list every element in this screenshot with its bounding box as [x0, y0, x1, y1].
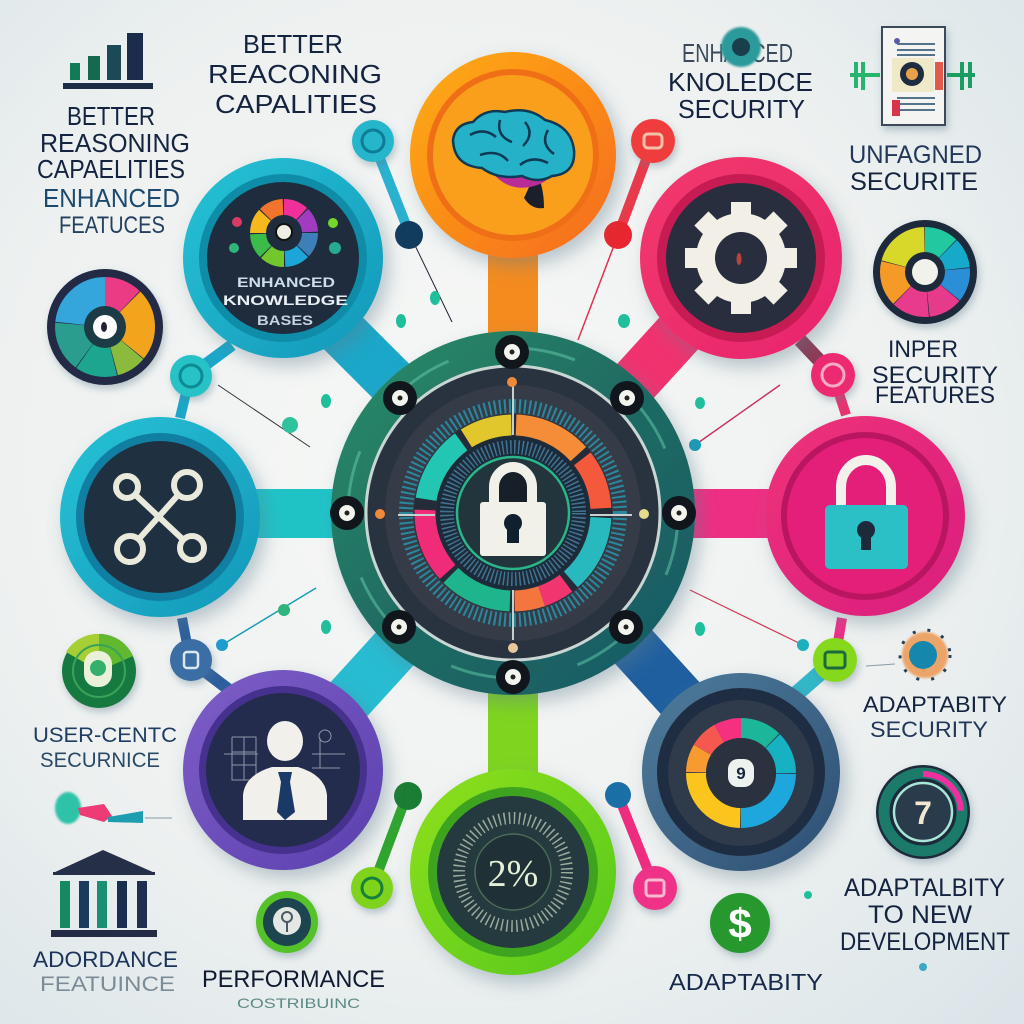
node: slate donut chart [642, 673, 840, 871]
label: unfagned securite [849, 141, 982, 196]
node caption: BASES [257, 312, 313, 328]
icon: teal swirl [721, 27, 761, 67]
icon: padlock [825, 460, 908, 569]
donut chart [677, 709, 805, 837]
node caption: KNOWLEDGE [223, 292, 348, 308]
node: lime gauge: 2% [488, 853, 538, 895]
label: better reasoning capabilities (top): CAPALITIES [215, 89, 377, 119]
node: slate donut chart: 9 [736, 764, 746, 783]
label: enhanced knowledge security [668, 38, 813, 124]
label: inper security features: SECURITY [872, 362, 998, 389]
label: adaptability bottom: ADAPTABITY [669, 969, 823, 995]
node: purple person [183, 670, 383, 870]
label: better reasoning capabilities, enhanced features: ENHANCED [43, 183, 180, 213]
label: better reasoning capabilities, enhanced features: BETTER [67, 101, 155, 131]
label: adordance features: ADORDANCE [33, 947, 178, 972]
label: better reasoning capabilities, enhanced features: CAPAELITIES [37, 154, 185, 184]
label: better reasoning capabilities (top): BETTER [243, 29, 343, 59]
icon: arrow key [55, 792, 172, 824]
label: user-centric security: SECURNICE [40, 749, 160, 772]
label: adaptability to new development: DEVELOPMENT [840, 928, 1010, 956]
icon: green user badge [62, 634, 136, 708]
outer tick ring [406, 406, 620, 620]
node: pink gear [640, 157, 842, 359]
label: unfagned securite: UNFAGNED [849, 141, 982, 169]
label: enhanced knowledge security: KNOLEDCE [668, 67, 813, 97]
inner tick ring [437, 437, 589, 589]
central hub [330, 331, 696, 695]
label: performance: PERFORMANCE [202, 966, 385, 993]
satellite stems and dots [180, 141, 846, 888]
icon: pie wheel right [873, 220, 977, 324]
label: better reasoning capabilities, enhanced features: REASONING [40, 128, 190, 158]
crosshair lines [398, 385, 632, 640]
label: adaptability security: ADAPTABITY [863, 692, 1007, 717]
connectors between hub and nodes [250, 240, 780, 780]
colored gauge segments [389, 389, 637, 637]
icon: document [850, 27, 975, 125]
label: adaptability to new development [840, 874, 1010, 956]
rainbow wheel [247, 196, 321, 270]
chart grid sketch [224, 730, 345, 780]
label: unfagned securite: SECURITE [850, 168, 978, 196]
icon: network [116, 472, 204, 562]
label: adordance features: FEATUINCE [40, 973, 175, 996]
label: performance [202, 966, 385, 1011]
icon: person [243, 721, 327, 820]
label: user-centric security: USER-CENTC [33, 724, 177, 747]
node: lime gauge [410, 769, 616, 975]
icon: orange blue badge [866, 630, 950, 680]
label: enhanced knowledge security: SECURITY [678, 94, 805, 124]
icon: green badge [256, 891, 318, 953]
label: inper security features [872, 336, 998, 409]
node: teal knowledge base [183, 158, 383, 358]
label: inper security features: FEATURES [875, 382, 995, 409]
center padlock [480, 467, 546, 556]
icon: pie wheel left [47, 269, 163, 385]
label: adaptability security [863, 692, 1007, 742]
label: adaptability security: SECURITY [870, 717, 988, 742]
icon: brain [453, 110, 574, 208]
label: adaptability to new development: TO NEW [868, 901, 972, 929]
icon: gear [685, 202, 797, 314]
node caption [223, 274, 348, 328]
scattered accent glyphs [278, 291, 927, 971]
label: adordance features [33, 947, 178, 996]
label: better reasoning capabilities, enhanced features: FEATUCES [59, 212, 165, 239]
label: better reasoning capabilities (top) [208, 29, 382, 119]
label: better reasoning capabilities (top): REACONING [208, 59, 382, 89]
icon: dollar badge [710, 893, 770, 953]
icon: bar chart [63, 33, 153, 89]
icon: clock seven: 7 [914, 795, 932, 831]
satellite badges [170, 119, 857, 910]
label: inper security features: INPER [888, 336, 958, 363]
hub bolts [330, 335, 696, 694]
icon: clock seven [876, 765, 970, 859]
icon: dollar badge: $ [728, 900, 752, 947]
label: better reasoning capabilities, enhanced features [37, 101, 190, 239]
hub decorative arcs [348, 348, 678, 678]
node: magenta padlock [765, 416, 965, 616]
label: performance: COSTRIBUINC [237, 995, 360, 1011]
label: user-centric security [33, 724, 177, 772]
icon: classical building [51, 850, 157, 937]
node caption: ENHANCED [237, 274, 335, 290]
node: orange brain [410, 52, 616, 258]
node: teal network [60, 417, 260, 617]
label: adaptability to new development: ADAPTALBITY [844, 874, 1005, 902]
label: enhanced knowledge security: ENHANCED [682, 38, 793, 68]
